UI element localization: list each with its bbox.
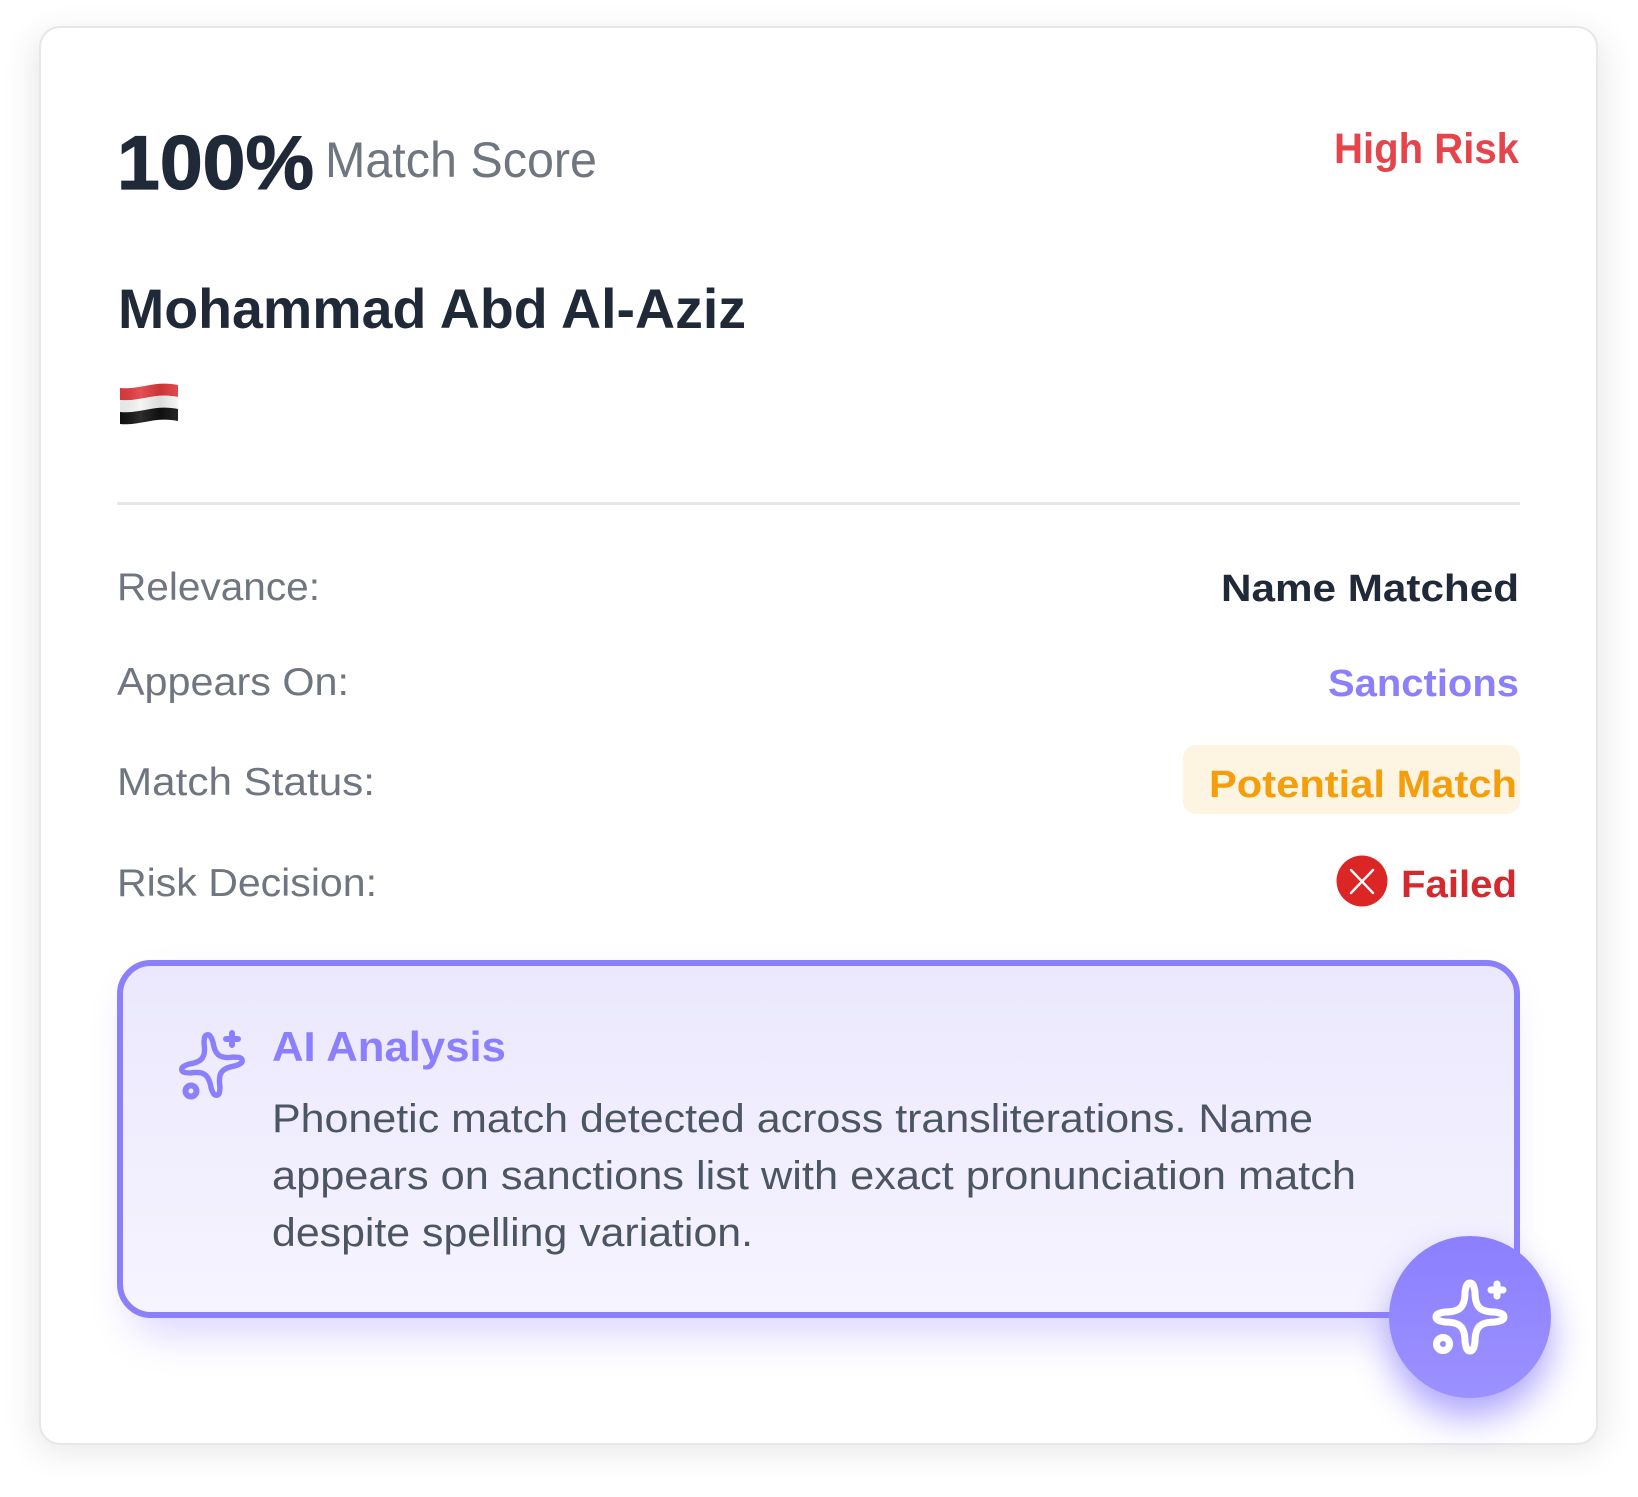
row: appears on: Appears On:	[117, 661, 349, 704]
AI body text	[272, 1097, 1356, 1255]
row: appears on: Sanctions	[1328, 663, 1519, 705]
status pill: Potential Match	[1209, 764, 1517, 806]
status pill	[1183, 745, 1520, 814]
icon: failed	[1336, 856, 1388, 906]
row: relevance: Relevance:	[117, 566, 320, 609]
row: risk decision: Failed	[1401, 864, 1517, 906]
row: match status: Match Status:	[117, 761, 375, 804]
row: relevance: Name Matched	[1221, 568, 1519, 610]
AI body text: appears on sanctions list with exact pronunciation match	[272, 1154, 1356, 1198]
row: relevance	[117, 566, 1519, 610]
divider	[117, 502, 1520, 505]
match score	[117, 121, 597, 206]
AI body text: despite spelling variation.	[272, 1211, 753, 1255]
row: risk decision	[117, 856, 1517, 906]
row: match status	[117, 745, 1520, 814]
row: risk decision: Risk Decision:	[117, 862, 377, 905]
match score: Match Score	[325, 132, 597, 188]
AI body text: Phonetic match detected across transliterations. Name	[272, 1097, 1313, 1141]
floating AI button	[1389, 1236, 1551, 1417]
match score: 100%	[117, 121, 314, 206]
risk label: High Risk	[1334, 125, 1519, 173]
icon: AI sparkle	[177, 1030, 247, 1100]
row: appears on	[117, 661, 1519, 705]
panel: AI analysis	[120, 963, 1517, 1335]
icon: Yemen flag	[120, 384, 178, 424]
AI heading: AI Analysis	[272, 1023, 506, 1070]
icon: white sparkle	[1436, 1283, 1504, 1351]
person name: Mohammad Abd Al-Aziz	[118, 277, 746, 340]
